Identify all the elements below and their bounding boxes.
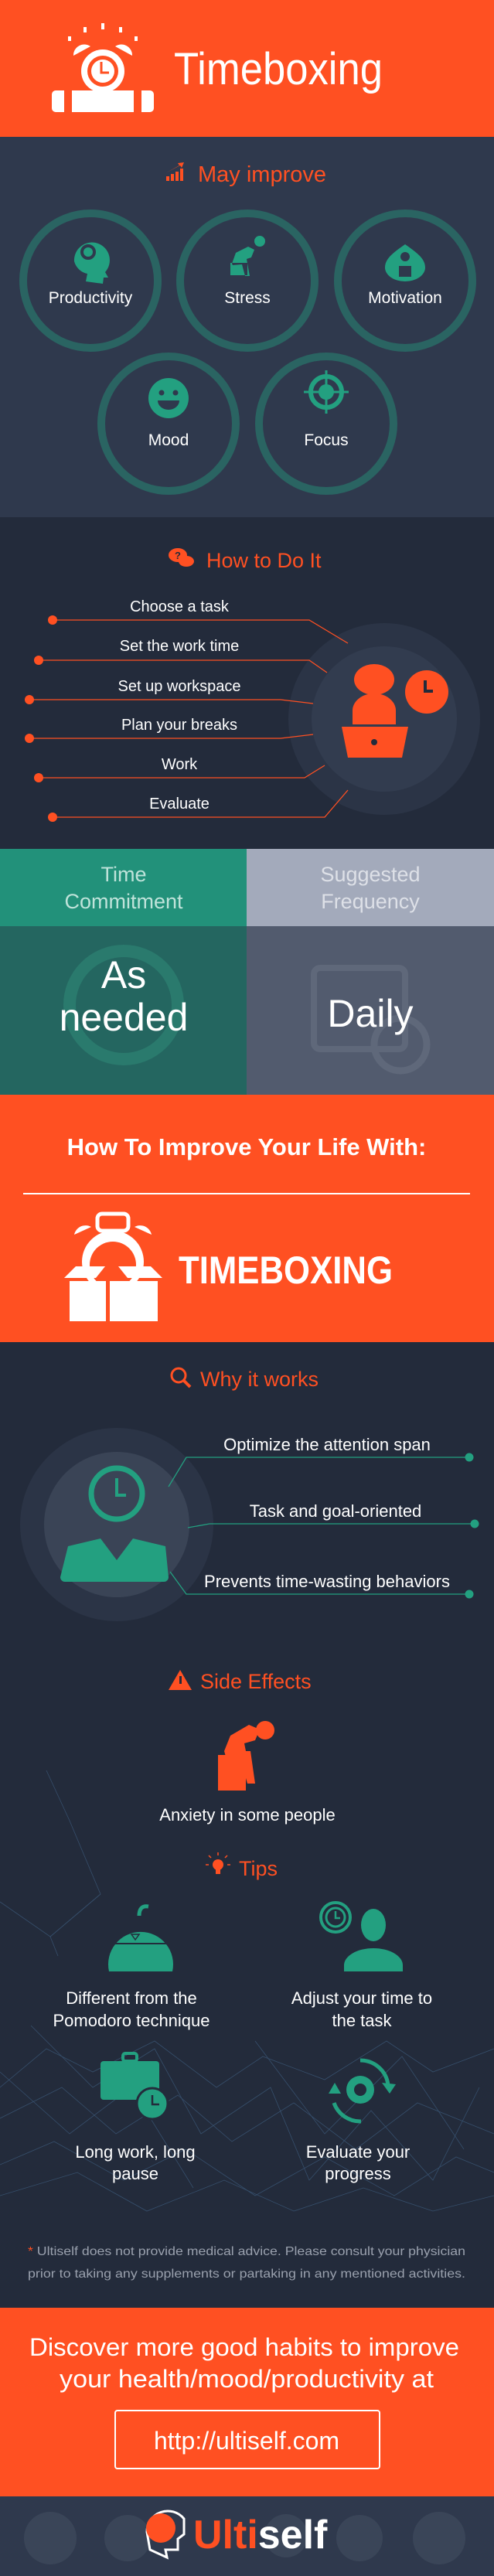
panel: may improve bbox=[23, 162, 472, 491]
panel: tips bbox=[53, 1852, 432, 2183]
call to action: your health/mood/productivity at bbox=[60, 2365, 434, 2393]
item: productivity bbox=[23, 213, 158, 348]
tip: evaluate progress bbox=[306, 2060, 410, 2183]
panel: side effects bbox=[159, 1670, 336, 1825]
panel: time commitment bbox=[0, 849, 247, 1095]
disclaimer bbox=[28, 2245, 465, 2281]
tip: adjust time bbox=[291, 1903, 432, 2030]
panel: how to do it: Set up workspace bbox=[118, 678, 240, 695]
icon: alarm clock on box bbox=[52, 23, 154, 112]
panel: why it works: Prevents time-wasting behaviors bbox=[204, 1572, 450, 1591]
item: motivation: Motivation bbox=[368, 289, 442, 307]
item: productivity: Productivity bbox=[49, 289, 133, 307]
illustration: worker with clock bbox=[288, 623, 480, 815]
panel: side effects: Anxiety in some people bbox=[159, 1805, 336, 1825]
panel: how to do it: Plan your breaks bbox=[121, 717, 237, 734]
backgrounds bbox=[0, 0, 494, 137]
footer bbox=[0, 2496, 494, 2576]
item: stress: Stress bbox=[224, 289, 271, 307]
item: focus bbox=[259, 356, 393, 491]
disclaimer: * Ultiself does not provide medical advice. Please consult your physician bbox=[28, 2245, 465, 2258]
panel: time commitment: needed bbox=[60, 996, 188, 1039]
tip: long work long pause bbox=[75, 2053, 196, 2183]
title: Timeboxing bbox=[174, 44, 383, 94]
panel: how to do it bbox=[25, 548, 480, 822]
reasons list bbox=[169, 1457, 475, 1594]
item: motivation bbox=[338, 213, 472, 348]
icon: alarm clock in box bbox=[64, 1214, 162, 1322]
network background bbox=[0, 1770, 494, 2211]
tip: pomodoro: Pomodoro technique bbox=[53, 2011, 210, 2030]
item: mood bbox=[101, 356, 236, 491]
icon: anxious person bbox=[218, 1721, 274, 1791]
call to action bbox=[0, 2308, 494, 2496]
panel: suggested frequency: Daily bbox=[327, 992, 414, 1035]
heading: tips bbox=[206, 1852, 278, 1880]
panel: suggested frequency: Frequency bbox=[321, 890, 420, 913]
tip: pomodoro: Different from the bbox=[66, 1988, 197, 2008]
panel: time commitment: Commitment bbox=[64, 890, 183, 913]
panel: how to do it: Evaluate bbox=[149, 796, 210, 813]
tip: evaluate progress: progress bbox=[325, 2164, 391, 2183]
panel: how to do it: Choose a task bbox=[130, 598, 230, 615]
panel: how to improve banner: TIMEBOXING bbox=[179, 1249, 393, 1292]
panel: how to improve banner: How To Improve Your Life With: bbox=[67, 1133, 426, 1160]
heading: how to do it: How to Do It bbox=[206, 549, 322, 572]
item: focus: Focus bbox=[304, 431, 349, 449]
panel: how to do it: Work bbox=[162, 756, 198, 773]
steps list bbox=[29, 620, 348, 817]
panel: how to do it: Set the work time bbox=[120, 638, 239, 655]
call to action: Discover more good habits to improve bbox=[29, 2333, 459, 2361]
tip: adjust time: the task bbox=[332, 2011, 393, 2030]
heading: how to do it: ? bbox=[175, 550, 181, 561]
header bbox=[52, 23, 383, 112]
item: mood: Mood bbox=[148, 431, 189, 449]
call to action: http://ultiself.com bbox=[154, 2427, 339, 2455]
item: stress bbox=[180, 213, 315, 348]
tip: adjust time: Adjust your time to bbox=[291, 1988, 432, 2008]
tip: long work long pause: pause bbox=[112, 2164, 158, 2183]
panel: how to improve banner bbox=[0, 1095, 494, 1342]
heading: side effects: Side Effects bbox=[200, 1670, 312, 1693]
panel: suggested frequency: Suggested bbox=[320, 863, 421, 886]
heading: why it works: Why it works bbox=[200, 1368, 319, 1391]
tip: evaluate progress: Evaluate your bbox=[306, 2142, 410, 2162]
panel: time commitment: As bbox=[101, 953, 146, 997]
panel: suggested frequency bbox=[247, 849, 494, 1095]
panel: time commitment: Time bbox=[101, 863, 147, 886]
illustration: person with clock bbox=[20, 1428, 213, 1621]
tip: pomodoro bbox=[53, 1906, 210, 2030]
heading: tips: Tips bbox=[239, 1857, 278, 1880]
heading: may improve: May improve bbox=[198, 162, 326, 187]
disclaimer: prior to taking any supplements or partaking in any mentioned activities. bbox=[28, 2268, 465, 2281]
panel: why it works: Optimize the attention span bbox=[223, 1435, 431, 1454]
logo: Ultiself bbox=[193, 2513, 328, 2557]
panel: why it works: Task and goal-oriented bbox=[250, 1501, 421, 1521]
panel: why it works bbox=[20, 1368, 479, 1621]
tip: long work long pause: Long work, long bbox=[75, 2142, 196, 2162]
